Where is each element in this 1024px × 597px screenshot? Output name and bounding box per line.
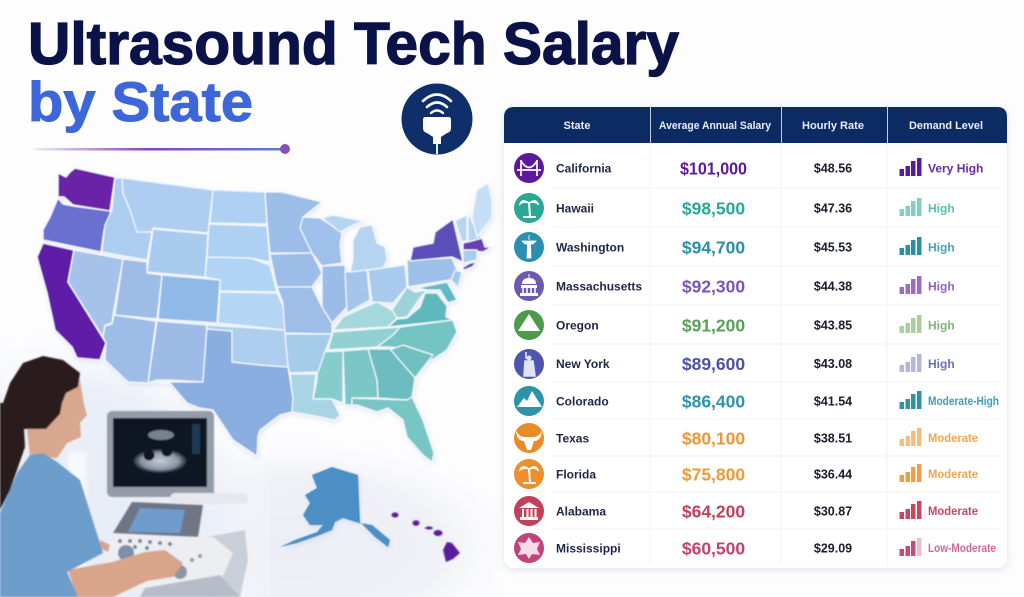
- row: Massachusetts: $44.38: [814, 280, 852, 294]
- state: Idaho: [102, 178, 152, 260]
- ultrasound machine base: [140, 530, 248, 597]
- state: Arkansas: [285, 334, 332, 373]
- row: Colorado: Colorado: [556, 394, 609, 408]
- row: California: Very High: [928, 162, 983, 176]
- icon: magnolia: [514, 533, 544, 563]
- state: Texas: [153, 326, 293, 456]
- state: New Jersey: [451, 270, 462, 287]
- row: Washington: $94,700: [682, 238, 745, 258]
- icon: courthouse: [514, 496, 544, 526]
- state: Wyoming: [147, 229, 208, 277]
- row: Alabama: Alabama: [556, 504, 606, 518]
- row: Texas: $38.51: [814, 432, 852, 446]
- row: Florida: $36.44: [814, 468, 852, 482]
- state: Kansas: [218, 292, 285, 330]
- monitor arm: [170, 493, 248, 504]
- state: Long Island: [462, 262, 477, 270]
- hair and ponytail: [0, 356, 80, 510]
- row: Florida: $75,800: [682, 464, 745, 484]
- icon: mountain: [514, 310, 544, 340]
- row: Colorado: $86,400: [682, 392, 745, 412]
- state: Florida: [352, 397, 434, 462]
- chair: [0, 555, 18, 597]
- row: Florida: Florida: [556, 468, 596, 482]
- state: Louisiana: [290, 374, 340, 420]
- row: Alabama: Moderate: [928, 504, 978, 518]
- row: Washington: $45.53: [814, 240, 852, 254]
- row: Florida: Moderate: [928, 467, 978, 481]
- state: West Virginia: [392, 287, 427, 318]
- icon: bridge: [514, 153, 544, 183]
- icon: longhorn: [514, 423, 544, 453]
- title underline with dot: [35, 144, 290, 154]
- table panel: [504, 107, 1007, 568]
- monitor: [107, 411, 214, 497]
- demand bars: [900, 391, 922, 409]
- demand bars: [900, 354, 922, 372]
- icon: space needle: [514, 232, 544, 262]
- row: California: $101,000: [680, 158, 747, 178]
- row: Hawaii: $98,500: [682, 198, 745, 218]
- row: Massachusetts: High: [928, 280, 955, 294]
- state: Missouri: [277, 287, 332, 334]
- row: New York: New York: [556, 357, 610, 371]
- row: Colorado: Moderate-High: [928, 394, 999, 408]
- demand bars: [900, 158, 922, 176]
- row: Washington: Washington: [556, 240, 624, 254]
- row: California: California: [556, 162, 612, 176]
- title: [28, 11, 679, 133]
- table header: Demand Level: [909, 120, 983, 132]
- row: Texas: $80,100: [682, 428, 745, 448]
- row: Massachusetts: $92,300: [682, 276, 745, 296]
- arm and hand: [68, 550, 183, 597]
- state: New Mexico: [148, 321, 207, 383]
- table header: State: [564, 120, 590, 132]
- row: Washington: [514, 232, 955, 262]
- icon: mountains: [514, 386, 544, 416]
- row: Massachusetts: [514, 271, 955, 301]
- state: Wisconsin: [300, 217, 342, 266]
- photo: sonographer at ultrasound machine: [0, 355, 248, 597]
- demand bars: [900, 501, 922, 519]
- row: Mississippi: Low-Moderate: [928, 541, 996, 555]
- table header: Average Annual Salary: [659, 120, 772, 132]
- state: Maryland and Delaware: [417, 282, 457, 303]
- row: Alabama: [514, 496, 978, 526]
- icon: statue of liberty: [514, 349, 544, 379]
- row: Alabama: $30.87: [814, 504, 852, 518]
- map: Hawaii: [392, 512, 460, 562]
- state: Michigan: [322, 215, 387, 272]
- row: Texas: Texas: [556, 432, 589, 446]
- state: Massachusetts: [463, 238, 492, 252]
- state: Minnesota: [265, 192, 322, 253]
- row: New York: High: [928, 357, 955, 371]
- heading line two: by State: [28, 70, 253, 133]
- state: Montana: [122, 178, 213, 233]
- table header: Hourly Rate: [802, 120, 864, 132]
- state: North Dakota: [210, 190, 267, 224]
- scrubs top: [0, 453, 103, 597]
- row: California: [514, 153, 983, 183]
- demand bars: [900, 315, 922, 333]
- row: Washington: High: [928, 240, 955, 254]
- row: New York: $43.08: [814, 357, 852, 371]
- machine lower body: [140, 575, 240, 597]
- state: Arizona: [103, 315, 156, 383]
- row: Oregon: High: [928, 318, 955, 332]
- row: Mississippi: [514, 533, 996, 563]
- state: Mississippi: [313, 351, 343, 403]
- state: Maine: [472, 183, 492, 237]
- row: Mississippi: $60,500: [682, 538, 745, 558]
- state: Virginia: [388, 293, 453, 327]
- row: Oregon: $91,200: [682, 316, 745, 336]
- heading line one: Ultrasound Tech Salary: [28, 11, 679, 77]
- icon: ultrasound probe: [402, 84, 472, 154]
- demand bars: [900, 276, 922, 294]
- row: Hawaii: Hawaii: [556, 202, 594, 216]
- row: New York: [514, 349, 955, 379]
- state: Nebraska: [205, 257, 277, 292]
- state: Alabama: [343, 349, 378, 405]
- row: Colorado: [514, 386, 999, 416]
- row: Oregon: $43.85: [814, 318, 852, 332]
- state: Iowa: [270, 253, 322, 287]
- state: Kentucky: [333, 302, 397, 330]
- demand bars: [900, 538, 922, 556]
- row: Colorado: $41.54: [814, 394, 852, 408]
- state: Washington: [58, 168, 115, 211]
- state: South Dakota: [207, 224, 270, 262]
- demand bars: [900, 198, 922, 216]
- state: North Carolina: [377, 320, 457, 360]
- table header: [504, 107, 1007, 143]
- state: Ohio: [368, 265, 407, 303]
- state: Connecticut and Rhode Island: [463, 250, 477, 263]
- state: Utah: [115, 259, 162, 319]
- row: Hawaii: [514, 193, 955, 223]
- state: Indiana: [345, 270, 370, 313]
- row: Florida: [514, 459, 978, 489]
- row: Hawaii: $47.36: [814, 202, 852, 216]
- state: South Carolina: [390, 345, 433, 378]
- row: Oregon: Oregon: [556, 318, 599, 332]
- row: Mississippi: $29.09: [814, 542, 852, 556]
- row: New York: $89,600: [682, 354, 745, 374]
- state: Pennsylvania: [407, 258, 457, 287]
- keyboard: [100, 537, 233, 590]
- icon: capitol: [514, 271, 544, 301]
- state: New Hampshire: [468, 213, 482, 242]
- state: Georgia: [368, 349, 415, 400]
- state: Oklahoma: [207, 325, 288, 367]
- state: Illinois: [322, 265, 347, 323]
- row: Hawaii: High: [928, 202, 955, 216]
- control panel: [113, 502, 203, 537]
- state: Tennessee: [328, 327, 400, 350]
- icon: palm tree: [514, 459, 544, 489]
- state: Vermont: [455, 215, 467, 242]
- state: Colorado: [158, 275, 220, 323]
- row: Oregon: [514, 310, 955, 340]
- map: Alaska: [280, 467, 390, 547]
- row: Massachusetts: Massachusetts: [556, 280, 642, 294]
- demand bars: [900, 237, 922, 255]
- state: Oregon: [43, 198, 112, 252]
- row: Alabama: $64,200: [682, 502, 745, 522]
- row: Mississippi: Mississippi: [556, 542, 621, 556]
- map: contiguous United States: [37, 168, 492, 462]
- row: Texas: [514, 423, 978, 453]
- state: Nevada: [68, 250, 123, 337]
- demand bars: [900, 428, 922, 446]
- row: California: $48.56: [814, 162, 852, 176]
- icon: palm tree: [514, 193, 544, 223]
- demand bars: [900, 464, 922, 482]
- row: Texas: Moderate: [928, 431, 978, 445]
- state: New York: [410, 219, 463, 262]
- state: California: [37, 243, 106, 360]
- neck and face: [27, 372, 87, 458]
